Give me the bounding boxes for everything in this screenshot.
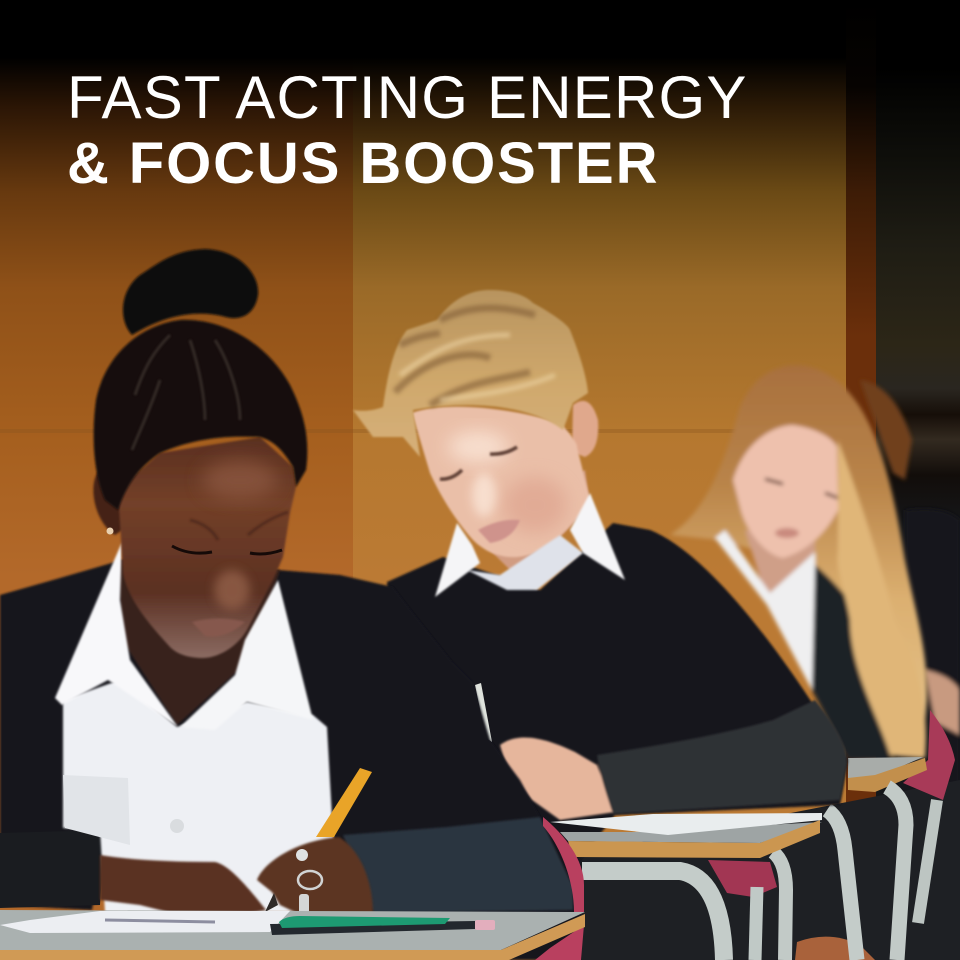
seat and chair tubes behind [582,810,875,960]
face [412,407,590,557]
face [733,425,838,558]
collar left [55,542,178,727]
cardigan body [0,560,573,915]
title [67,64,748,196]
lit forearm sleeve [343,817,573,913]
girl with long blonde hair [670,365,927,760]
collar right [180,580,313,730]
title: & FOCUS BOOSTER [67,131,659,196]
neck [745,530,815,600]
sweater [387,523,848,960]
ear [572,401,598,457]
hair [353,290,588,457]
dark legs behind desks [575,780,960,960]
left sleeve cuff [0,830,105,908]
collar [467,535,583,590]
bun [123,249,258,335]
face [118,437,296,658]
hair [94,320,307,510]
hair [670,365,927,758]
neck [470,470,590,580]
shirt [715,530,815,690]
red chair back front [535,817,584,960]
title: FAST ACTING ENERGY [67,64,748,131]
boy student [353,290,848,960]
cardigan [812,565,893,760]
white shirt [63,680,333,912]
right desk and chair [848,710,955,960]
background student at right [860,380,960,960]
boy's arm and hand [500,700,847,820]
front desk with papers [0,910,585,960]
middle desk with paper [550,813,822,858]
ear [93,470,130,535]
hands with rings [100,855,266,915]
front student with hair bun [0,249,573,917]
pencil [316,768,372,837]
neck [118,560,280,725]
front hair lock [837,440,926,758]
